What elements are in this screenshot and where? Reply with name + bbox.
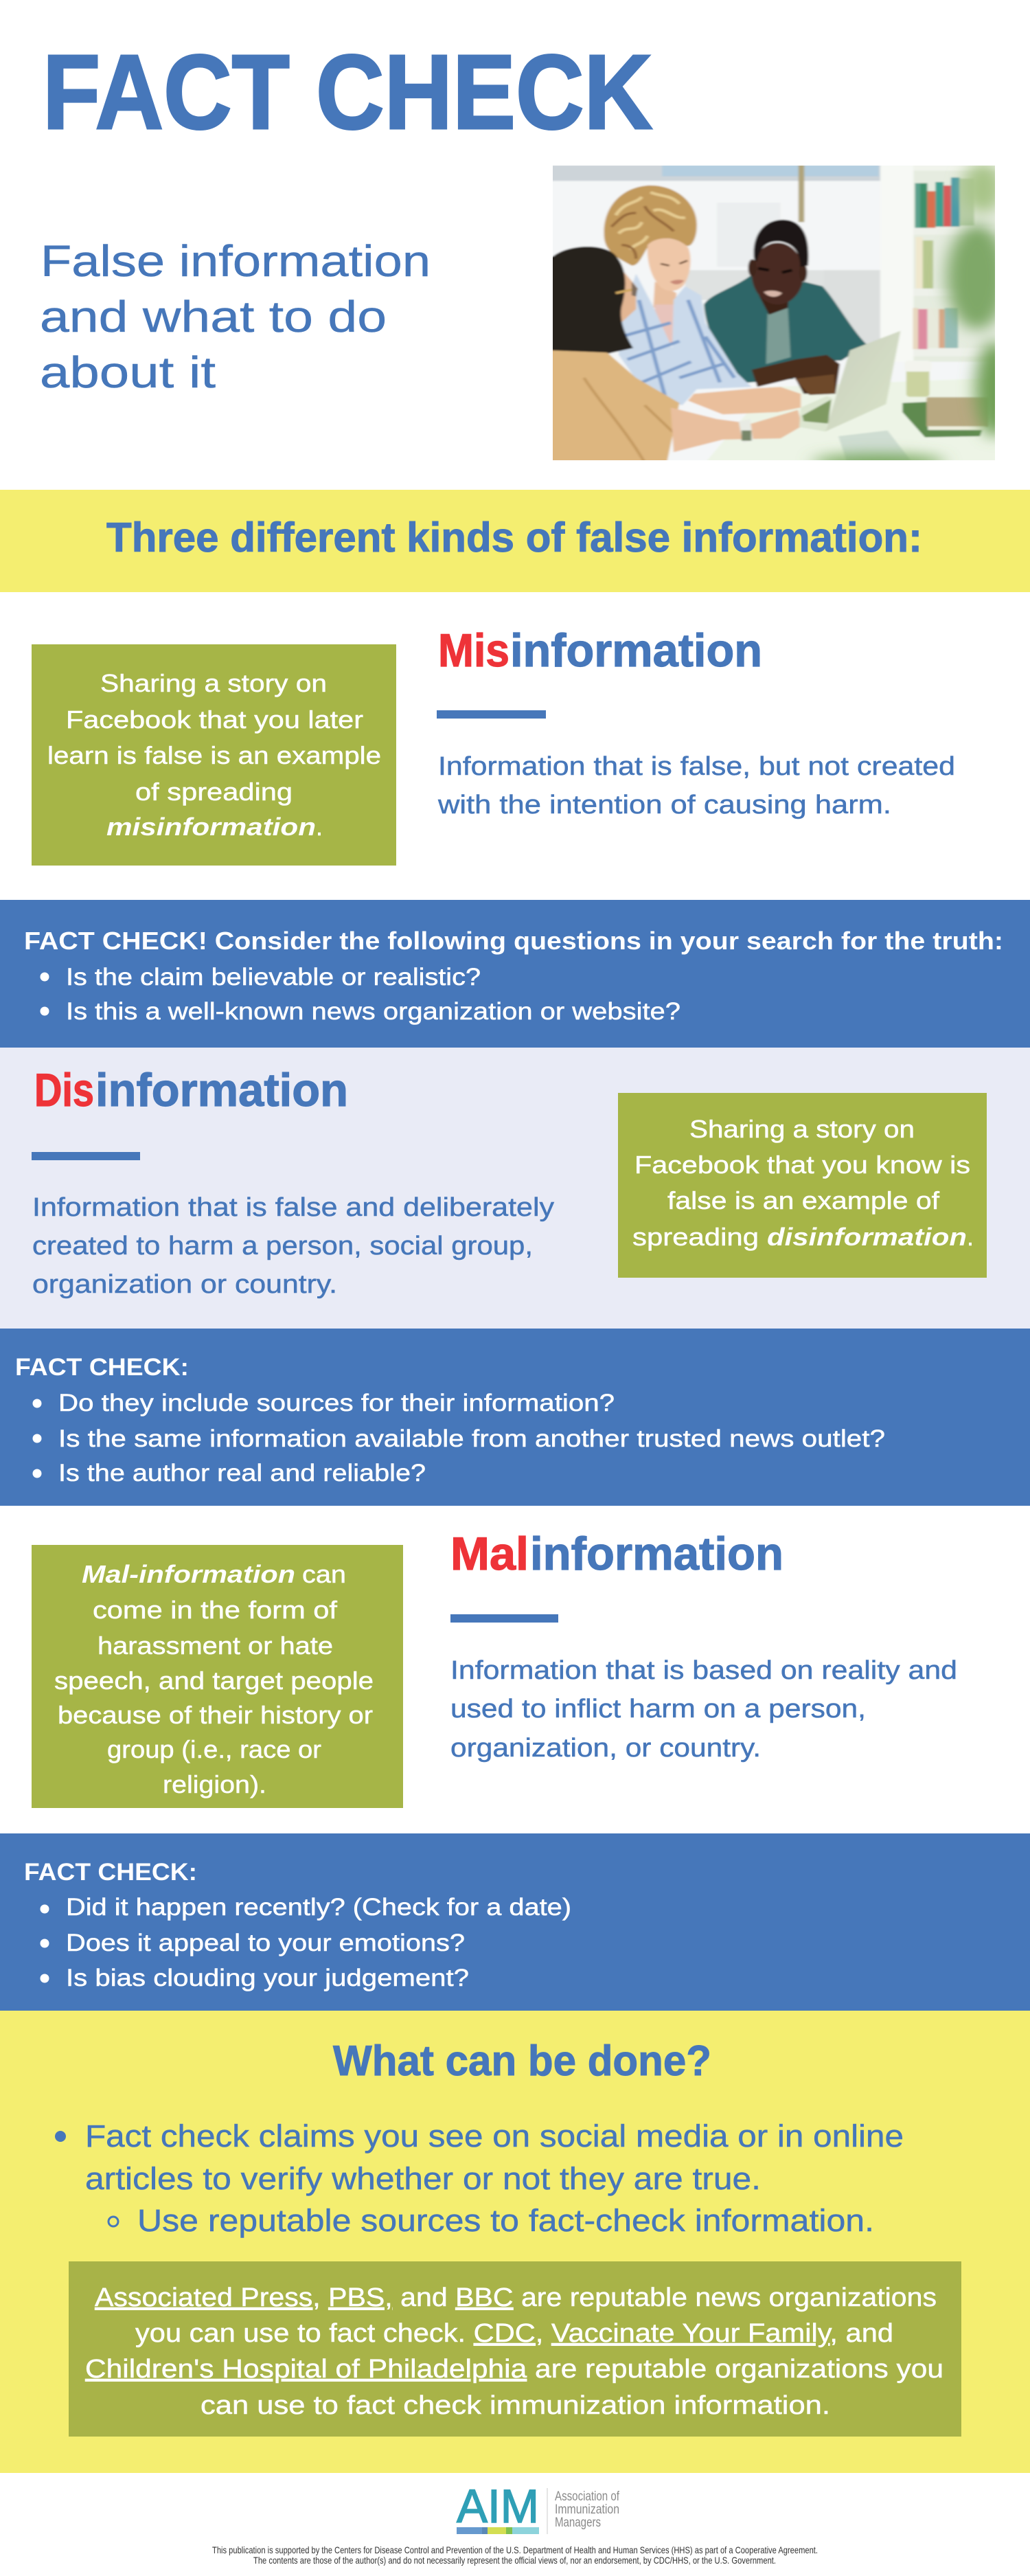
example card: misinformation: misinformation bbox=[106, 813, 316, 841]
panel: fact check questions 3 bbox=[0, 1833, 1030, 2011]
panel: fact check questions 3: FACT CHECK: bbox=[24, 1859, 197, 1886]
action list: articles to verify whether or not they are true. bbox=[85, 2161, 761, 2196]
panel: fact check questions 3: Does it appeal to your emotions? bbox=[66, 1930, 465, 1956]
definition: misinformation: Information that is false, but not created bbox=[438, 752, 955, 781]
definition: misinformation bbox=[437, 752, 955, 820]
banner: three kinds of false information: Three different kinds of false information: bbox=[106, 515, 922, 561]
heading: disinformation: information bbox=[95, 1064, 348, 1116]
example card: misinformation: Facebook that you later bbox=[66, 705, 363, 734]
example card: malinformation: Mal-information bbox=[82, 1560, 295, 1588]
definition: malinformation: Information that is based on reality and bbox=[450, 1656, 957, 1685]
example card: disinformation bbox=[618, 1093, 987, 1278]
subtitle: about it bbox=[40, 348, 216, 397]
funding disclaimer: This publication is supported by the Centers for Disease Control and Prevention of the U.S. Department of Health and Human Services (HHS) as part of a Cooperative Agreement. bbox=[212, 2544, 818, 2555]
photo: three students around a laptop bbox=[553, 166, 995, 460]
panel: what can be done bbox=[0, 2011, 1030, 2473]
example card: misinformation: learn is false is an example bbox=[47, 741, 381, 769]
heading: misinformation: information bbox=[510, 624, 762, 677]
funding disclaimer: The contents are those of the author(s) and do not necessarily represent the official views of, nor an endorsement, by CDC/HHS, or the U.S. Government. bbox=[253, 2555, 776, 2566]
definition: disinformation bbox=[32, 1193, 554, 1299]
example card: disinformation: Sharing a story on bbox=[689, 1115, 915, 1143]
panel: fact check questions 2 bbox=[0, 1329, 1030, 1506]
funding disclaimer bbox=[212, 2544, 818, 2566]
panel: fact check questions 1 bbox=[0, 900, 1030, 1048]
subtitle: and what to do bbox=[40, 292, 387, 341]
banner: three kinds of false information bbox=[0, 490, 1030, 592]
example card: disinformation: disinformation bbox=[767, 1223, 967, 1251]
reputable sources box: Associated Press , PBS, and BBC are reputable news organizations bbox=[95, 2283, 937, 2312]
panel: misinformation bbox=[32, 624, 955, 866]
panel: fact check questions 2: Is the author real and reliable? bbox=[58, 1460, 426, 1487]
example card: malinformation bbox=[32, 1545, 403, 1808]
example card: malinformation: group (i.e., race or bbox=[107, 1735, 321, 1763]
example card: malinformation: come in the form of bbox=[93, 1596, 338, 1624]
example card: malinformation: because of their history or bbox=[58, 1701, 373, 1729]
action list bbox=[55, 2119, 904, 2238]
definition: malinformation: organization, or country. bbox=[450, 1734, 761, 1763]
panel: fact check questions 3: Is bias clouding your judgement? bbox=[66, 1965, 469, 1991]
heading: disinformation: Dis bbox=[34, 1064, 94, 1116]
title: FACT CHECK bbox=[43, 33, 652, 151]
panel: fact check questions 2: Is the same information available from another trusted news outlet? bbox=[58, 1425, 885, 1452]
definition: disinformation: organization or country. bbox=[32, 1270, 337, 1299]
heading: malinformation: Mal bbox=[450, 1528, 529, 1580]
panel: fact check questions 1: Is the claim believable or realistic? bbox=[66, 964, 481, 991]
example card: misinformation: Sharing a story on bbox=[100, 669, 327, 697]
subtitle bbox=[40, 236, 431, 397]
action list: Fact check claims you see on social media or in online bbox=[85, 2119, 904, 2154]
example card: misinformation: of spreading bbox=[135, 778, 293, 806]
action list: Use reputable sources to fact-check information. bbox=[137, 2203, 874, 2238]
reputable sources box: you can use to fact check. CDC, Vaccinate Your Family , and bbox=[135, 2319, 893, 2348]
example card: malinformation: speech, and target people bbox=[54, 1667, 374, 1695]
logo: Association of Immunization Managers: Immunization bbox=[555, 2502, 619, 2517]
example card: disinformation: . bbox=[967, 1223, 974, 1251]
logo: Association of Immunization Managers: AIM bbox=[457, 2480, 539, 2533]
heading: malinformation: information bbox=[530, 1528, 783, 1580]
subtitle: False information bbox=[41, 236, 431, 286]
logo: Association of Immunization Managers: Managers bbox=[555, 2516, 601, 2530]
panel: fact check questions 1: FACT CHECK! Consider the following questions in your search for the truth: bbox=[24, 927, 1003, 955]
reputable sources box: Children's Hospital of Philadelphia are reputable organizations you bbox=[85, 2355, 943, 2384]
panel: fact check questions 3: Did it happen recently? (Check for a date) bbox=[66, 1894, 571, 1921]
panel: fact check questions 2: FACT CHECK: bbox=[15, 1354, 189, 1381]
definition: malinformation bbox=[450, 1656, 957, 1763]
example card: misinformation: . bbox=[316, 813, 323, 841]
example card: disinformation: false is an example of bbox=[667, 1186, 940, 1214]
example card: disinformation: spreading bbox=[632, 1223, 759, 1251]
example card: malinformation: religion). bbox=[163, 1770, 266, 1798]
panel: disinformation bbox=[0, 1048, 1030, 1329]
panel: fact check questions 2: Do they include sources for their information? bbox=[58, 1390, 615, 1416]
reputable sources box bbox=[69, 2261, 961, 2437]
reputable sources box: can use to fact check immunization information. bbox=[201, 2391, 830, 2420]
definition: disinformation: Information that is false and deliberately bbox=[32, 1193, 554, 1222]
example card: malinformation: harassment or hate bbox=[98, 1631, 333, 1660]
example card: malinformation: can bbox=[302, 1560, 346, 1588]
panel: fact check questions 1: Is this a well-known news organization or website? bbox=[66, 998, 680, 1025]
example card: misinformation bbox=[32, 644, 396, 866]
definition: misinformation: with the intention of causing harm. bbox=[437, 791, 891, 820]
logo: Association of Immunization Managers bbox=[457, 2480, 620, 2534]
heading: misinformation: Mis bbox=[438, 624, 510, 677]
definition: disinformation: created to harm a person, social group, bbox=[32, 1232, 533, 1261]
panel: malinformation bbox=[32, 1528, 957, 1808]
heading: what can be done: What can be done? bbox=[333, 2037, 711, 2085]
definition: malinformation: used to inflict harm on a person, bbox=[450, 1695, 866, 1724]
example card: disinformation: Facebook that you know is bbox=[634, 1151, 970, 1179]
logo: Association of Immunization Managers: Association of bbox=[555, 2489, 620, 2504]
